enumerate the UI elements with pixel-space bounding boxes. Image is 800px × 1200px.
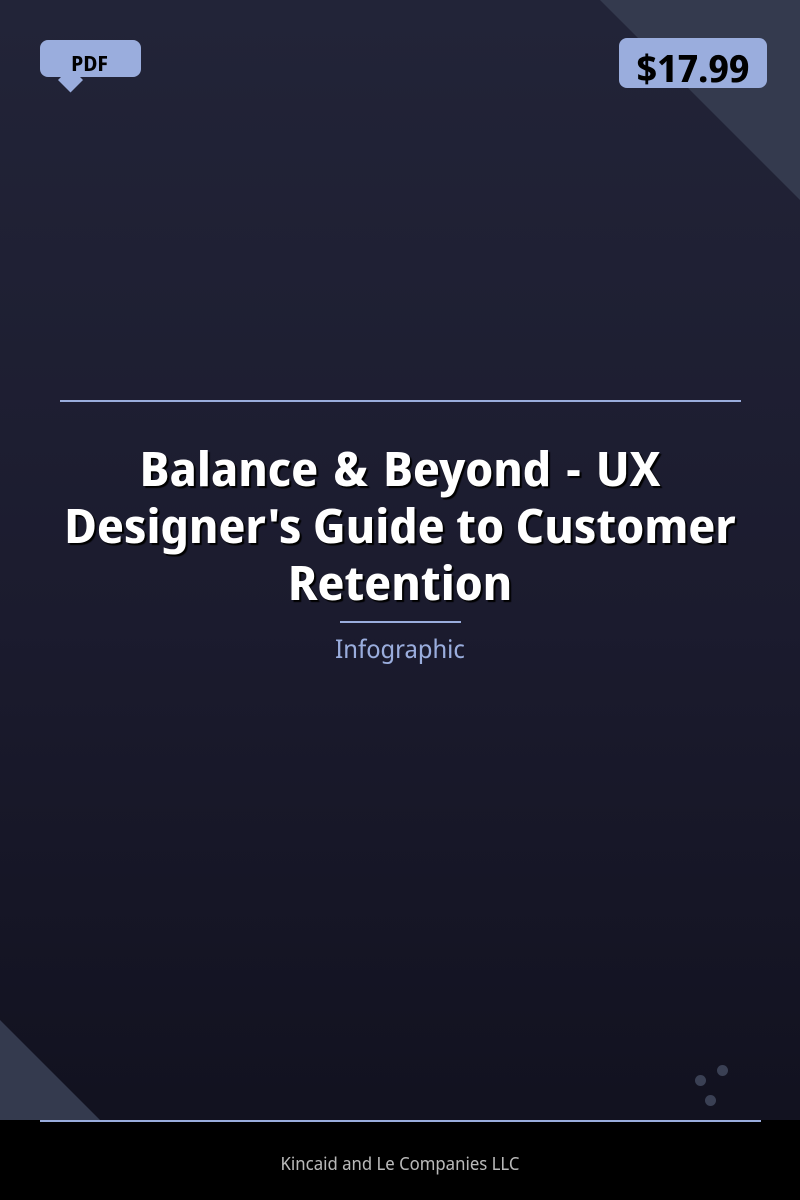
- footer company name: Kincaid and Le Companies LLC: [281, 1152, 519, 1176]
- price tag: $17.99: [637, 43, 749, 94]
- title: Balance & Beyond - UX: [140, 435, 660, 500]
- decorative corner triangle: bottom left: [0, 1020, 100, 1120]
- price tag: [619, 38, 767, 88]
- decorative corner triangle: top right: [600, 0, 800, 200]
- badge pointer: [58, 77, 83, 92]
- subtitle: Infographic: [335, 632, 465, 666]
- PDF badge: [40, 40, 141, 92]
- title: [64, 435, 738, 614]
- title: Designer's Guide to Customer: [64, 492, 736, 557]
- top divider: [60, 400, 741, 402]
- badge label: PDF: [71, 50, 108, 78]
- subtitle divider: [340, 621, 461, 623]
- badge body: [40, 40, 141, 77]
- title: Retention: [288, 549, 512, 614]
- decorative dots: [695, 1065, 728, 1106]
- footer divider: [40, 1120, 761, 1122]
- footer band: [0, 1120, 800, 1200]
